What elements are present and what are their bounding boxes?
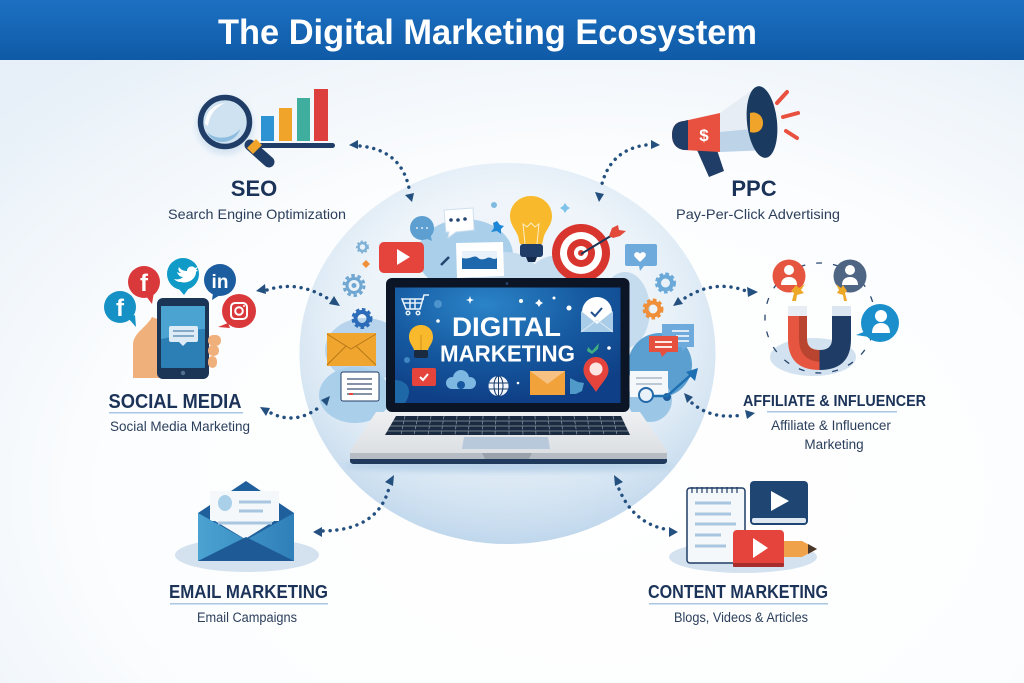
icon: megaphone bbox=[672, 85, 798, 177]
icon: growth card and arrow bbox=[630, 368, 698, 402]
central icon cluster behind the laptop bbox=[319, 196, 698, 423]
icon: open envelope bbox=[175, 481, 319, 572]
central circle backdrop bbox=[300, 163, 716, 544]
icon: cloud bbox=[446, 370, 476, 389]
subtitle: affiliate and influencer bbox=[771, 418, 891, 452]
subtitle: affiliate and influencer: Marketing bbox=[804, 437, 864, 452]
heading: content marketing: CONTENT MARKETING bbox=[648, 582, 828, 602]
subtitle: social media: Social Media Marketing bbox=[110, 418, 250, 434]
arrow: affiliate bottom link bbox=[684, 393, 755, 419]
icon: red message bubble bbox=[649, 336, 678, 357]
icon: orange envelope bbox=[327, 333, 376, 366]
laptop bbox=[343, 278, 673, 472]
avatar: red bbox=[772, 260, 806, 292]
arrow: email link bbox=[313, 475, 394, 537]
touchpad bbox=[462, 437, 550, 449]
icon: sparkle stars bbox=[491, 202, 570, 234]
icon: green check bbox=[587, 343, 599, 354]
arrow: SEO link bbox=[349, 140, 414, 202]
avatar: grey bbox=[834, 260, 866, 292]
laptop shadow bbox=[343, 460, 673, 472]
heading: email marketing: EMAIL MARKETING bbox=[169, 582, 328, 602]
subtitle: SEO: Search Engine Optimization bbox=[168, 206, 346, 222]
header banner bbox=[0, 0, 1024, 60]
arrow: social media top link bbox=[256, 284, 340, 306]
icon: shopping cart bbox=[402, 295, 429, 315]
icon: phone with social bubbles bbox=[104, 258, 256, 379]
screen heading: DIGITAL bbox=[452, 312, 561, 342]
icon: red check tag bbox=[412, 368, 436, 386]
icon: document bubble bbox=[341, 372, 379, 401]
arrow: affiliate top link bbox=[673, 286, 758, 306]
icon: small bulb bbox=[409, 325, 433, 358]
icon: list bubble bbox=[662, 324, 694, 351]
panel: content marketing bbox=[648, 481, 828, 625]
icon: megaphone: $ bbox=[699, 126, 709, 145]
icon: heart bubble bbox=[625, 244, 657, 271]
heading: SEO: SEO bbox=[231, 176, 277, 201]
avatar: blue bbox=[856, 304, 899, 342]
icon: magnifier and bar chart bbox=[196, 89, 335, 162]
icon: magnet and people bbox=[765, 260, 899, 376]
icon: location pin bbox=[584, 357, 608, 392]
icon: screen envelope bbox=[530, 371, 565, 395]
screen heading bbox=[440, 312, 575, 366]
subtitle: affiliate and influencer: Affiliate & Influencer bbox=[771, 418, 891, 433]
bubble: twitter bbox=[167, 258, 199, 295]
icon: check envelope bbox=[581, 297, 613, 332]
subtitle: content marketing: Blogs, Videos & Articles bbox=[674, 610, 808, 625]
screen bbox=[395, 288, 620, 403]
icon: yellow pull arrows bbox=[791, 284, 805, 301]
icon: white chat bubble bbox=[444, 208, 474, 238]
icon: globe bbox=[488, 376, 508, 396]
sparkles bbox=[436, 296, 611, 384]
icon: orange diamond bbox=[362, 260, 370, 268]
bubble: facebook red bbox=[128, 266, 160, 304]
icon: notepad, videos and pencil bbox=[669, 481, 817, 573]
bubble: linkedin: in bbox=[212, 272, 228, 293]
panel: PPC bbox=[672, 85, 840, 222]
soft clouds bbox=[319, 219, 692, 423]
subtitle: PPC: Pay-Per-Click Advertising bbox=[676, 206, 840, 222]
bubble: facebook red: f bbox=[140, 270, 149, 297]
bubble: instagram bbox=[218, 294, 256, 328]
icon: light bulb bbox=[510, 196, 552, 262]
laptop screen bezel bbox=[386, 278, 630, 412]
icon: image card bbox=[441, 242, 504, 278]
icon: chat bubble blue bbox=[410, 216, 434, 241]
heading: social media: SOCIAL MEDIA bbox=[108, 391, 242, 413]
icon: video play bbox=[379, 242, 424, 273]
heading: affiliate and influencer: AFFILIATE & INFLUENCER bbox=[743, 393, 926, 410]
bubble: linkedin bbox=[204, 264, 236, 300]
panel: social media bbox=[104, 258, 256, 434]
icons: gears bbox=[344, 242, 674, 328]
bubble: facebook blue bbox=[104, 291, 136, 327]
laptop base bbox=[350, 412, 667, 464]
subtitle: email marketing: Email Campaigns bbox=[197, 610, 297, 625]
icon: target with arrow bbox=[552, 224, 626, 282]
title: The Digital Marketing Ecosystem bbox=[218, 13, 757, 52]
arrow: content link bbox=[614, 475, 678, 537]
panel: email marketing bbox=[169, 481, 328, 625]
bubble: facebook blue: f bbox=[116, 295, 125, 322]
arrows bbox=[256, 140, 758, 537]
heading: PPC: PPC bbox=[731, 176, 777, 201]
arrow: PPC link bbox=[595, 140, 660, 202]
arrow: social media bottom link bbox=[260, 396, 330, 418]
panel: affiliate and influencer bbox=[743, 260, 926, 452]
icon: small blue flag bbox=[570, 378, 584, 394]
screen heading: MARKETING bbox=[440, 340, 575, 366]
keyboard bbox=[385, 416, 630, 435]
panel: SEO bbox=[168, 89, 346, 222]
